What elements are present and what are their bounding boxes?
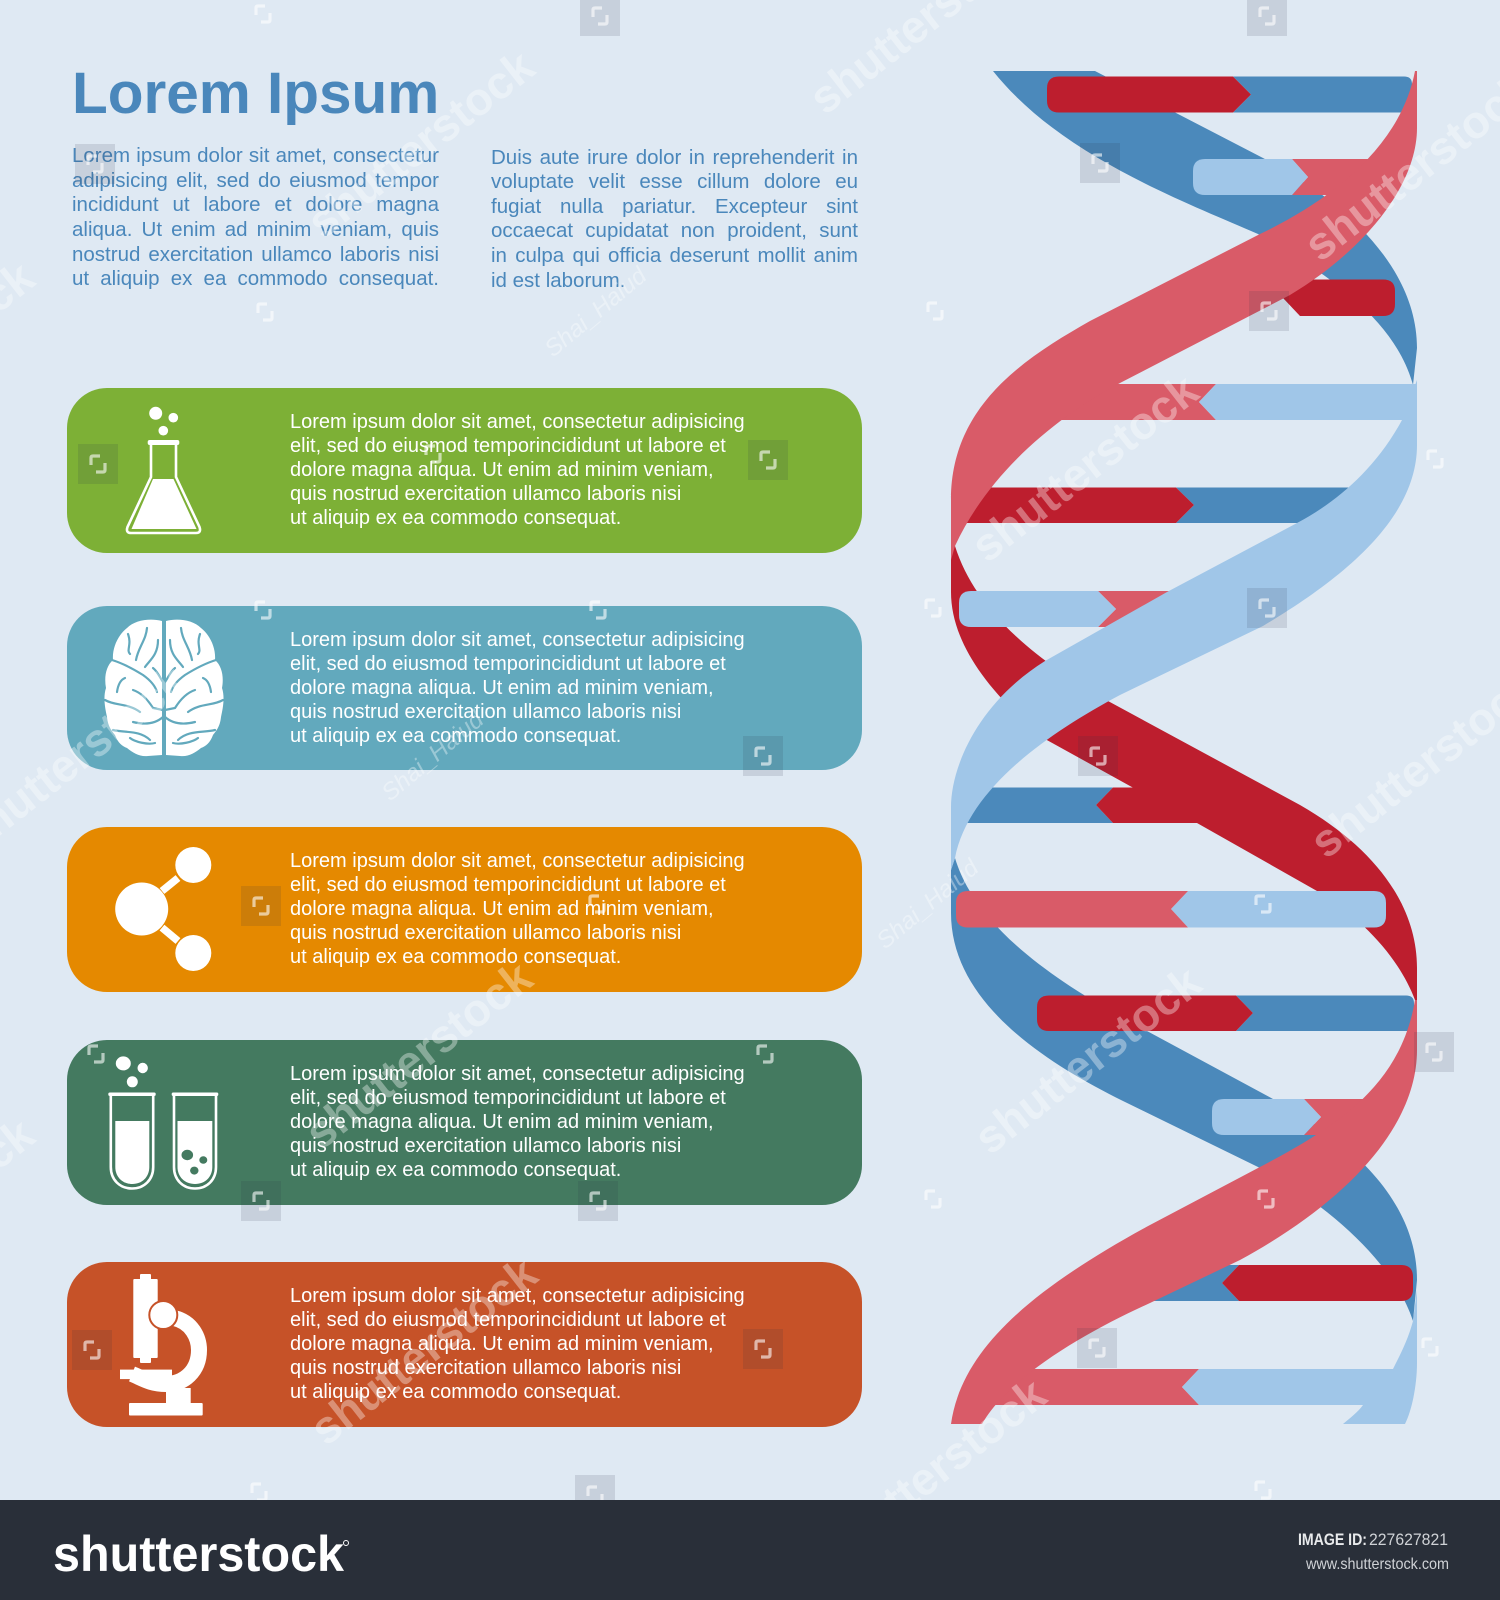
- heading: Lorem Ipsum: Lorem Ipsum: [72, 61, 439, 126]
- panel text: quis nostrud exercitation ullamco laboris nisi: [290, 701, 681, 723]
- text block: left intro column: ut aliquip ex ea commodo consequat.: [72, 267, 439, 290]
- text block: right intro column: id est laborum.: [491, 269, 625, 292]
- text block: left intro column: aliqua. Ut enim ad minim veniam, quis: [72, 218, 439, 241]
- text block: left intro column: Lorem ipsum dolor sit amet, consectetur: [72, 144, 439, 167]
- panel: green flask: [67, 388, 862, 553]
- rung 12: [985, 1369, 1400, 1405]
- text block: right intro column: in culpa qui officia deserunt mollit anim: [491, 244, 858, 267]
- panel: dark green test tubes: [67, 1040, 862, 1205]
- rung 7: [960, 788, 1230, 823]
- panel text: elit, sed do eiusmod temporincididunt ut labore et: [290, 1309, 726, 1331]
- panel text: dolore magna aliqua. Ut enim ad minim veniam,: [290, 677, 714, 699]
- watermark: shutterstock wordmarks: shutterstock: [300, 1246, 547, 1455]
- panel text: ut aliquip ex ea commodo consequat.: [290, 725, 621, 747]
- footer text: logo and image id: 227627821: [1369, 1530, 1448, 1549]
- watermark: shutterstock wordmarks: shutterstock: [961, 363, 1208, 572]
- panel text: [290, 850, 745, 968]
- icon: molecule: [115, 847, 212, 971]
- watermark: contributor name: Shai_Haiud: [872, 854, 984, 955]
- footer text: logo and image id: shutterstock: [53, 1526, 344, 1582]
- rung 10: [1212, 1099, 1380, 1135]
- panel text: quis nostrud exercitation ullamco laboris nisi: [290, 922, 681, 944]
- text block: right intro column: [491, 146, 858, 292]
- text block: left intro column: adipisicing elit, sed do eiusmod tempor: [72, 169, 439, 192]
- panel text: dolore magna aliqua. Ut enim ad minim veniam,: [290, 459, 714, 481]
- panel text: [290, 411, 745, 529]
- strand: lower dark blue: [951, 858, 1417, 1321]
- panel text: quis nostrud exercitation ullamco laboris nisi: [290, 483, 681, 505]
- text block: left intro column: nostrud exercitation ullamco laboris nisi: [72, 243, 439, 266]
- panel: orange molecule: [67, 827, 862, 992]
- strand: lower light blue: [1343, 1290, 1417, 1424]
- panel text: [290, 629, 745, 747]
- icon: microscope: [120, 1274, 207, 1416]
- panel text: quis nostrud exercitation ullamco laboris nisi: [290, 1357, 681, 1379]
- rung 4: [1040, 384, 1417, 420]
- rung 1: [1047, 76, 1412, 112]
- strand: lower pink: [951, 1000, 1417, 1424]
- panel text: Lorem ipsum dolor sit amet, consectetur adipisicing: [290, 850, 745, 872]
- strand: middle light blue: [951, 380, 1417, 870]
- watermark: contributor name: [377, 262, 984, 955]
- watermark: shutterstock wordmarks: shutterstock: [964, 955, 1211, 1164]
- panel text: ut aliquip ex ea commodo consequat.: [290, 1381, 621, 1403]
- panel text: dolore magna aliqua. Ut enim ad minim veniam,: [290, 1333, 714, 1355]
- footer text: logo and image id: [53, 1526, 1449, 1582]
- panel text: Lorem ipsum dolor sit amet, consectetur adipisicing: [290, 1285, 745, 1307]
- panel text: ut aliquip ex ea commodo consequat.: [290, 507, 621, 529]
- panel text: elit, sed do eiusmod temporincididunt ut labore et: [290, 874, 726, 896]
- panel text: quis nostrud exercitation ullamco laboris nisi: [290, 1135, 681, 1157]
- rung 5: [965, 488, 1360, 523]
- rung 11: [1130, 1265, 1413, 1301]
- strand: upper dark blue: [993, 71, 1417, 385]
- text block: right intro column: fugiat nulla pariatur. Excepteur sint: [491, 195, 858, 218]
- panel text: [290, 1285, 745, 1403]
- icon: brain: [104, 620, 224, 756]
- rung 2: [1193, 159, 1380, 195]
- panel text: dolore magna aliqua. Ut enim ad minim veniam,: [290, 1111, 714, 1133]
- text block: right intro column: occaecat cupidatat non proident, sunt: [491, 219, 858, 242]
- strand: dark red: [951, 540, 1417, 1005]
- rung 6: [959, 591, 1180, 627]
- strand: upper pink: [951, 71, 1417, 560]
- rung 3: [1283, 280, 1395, 316]
- footer bar: [0, 1500, 1500, 1600]
- panel text: elit, sed do eiusmod temporincididunt ut labore et: [290, 653, 726, 675]
- watermark: shutterstock wordmarks: shutterstock: [809, 1367, 1056, 1576]
- watermark: shutterstock wordmarks: shutterstock: [295, 950, 542, 1159]
- footer text: logo and image id: www.shutterstock.com: [1305, 1556, 1449, 1573]
- text block: left intro column: incididunt ut labore et dolore magna: [72, 193, 439, 216]
- icon: test tubes: [108, 1056, 218, 1190]
- icon: flask: [126, 406, 202, 534]
- watermark: contributor name: Shai_Haiud: [377, 706, 489, 807]
- rung 8: [956, 891, 1386, 928]
- panel text: Lorem ipsum dolor sit amet, consectetur adipisicing: [290, 411, 745, 433]
- panel text: Lorem ipsum dolor sit amet, consectetur adipisicing: [290, 629, 745, 651]
- panel text: [290, 1063, 745, 1181]
- panel: teal brain: [67, 606, 862, 770]
- text block: right intro column: Duis aute irure dolor in reprehenderit in: [491, 146, 858, 168]
- panel: rust microscope: [67, 1262, 862, 1427]
- rung 9: [1037, 996, 1414, 1031]
- panel text: elit, sed do eiusmod temporincididunt ut labore et: [290, 1087, 726, 1109]
- panel text: ut aliquip ex ea commodo consequat.: [290, 1159, 621, 1181]
- watermark: contributor name: Shai_Haiud: [540, 262, 652, 363]
- footer text: logo and image id: IMAGE ID:: [1298, 1530, 1367, 1549]
- watermark: shutterstock wordmarks: shutterstock: [297, 39, 544, 248]
- panel text: elit, sed do eiusmod temporincididunt ut labore et: [290, 435, 726, 457]
- text block: right intro column: voluptate velit esse cillum dolore eu: [491, 170, 858, 193]
- panel text: dolore magna aliqua. Ut enim ad minim veniam,: [290, 898, 714, 920]
- panel text: ut aliquip ex ea commodo consequat.: [290, 946, 621, 968]
- text block: left intro column: [72, 144, 439, 290]
- panel text: Lorem ipsum dolor sit amet, consectetur adipisicing: [290, 1063, 745, 1085]
